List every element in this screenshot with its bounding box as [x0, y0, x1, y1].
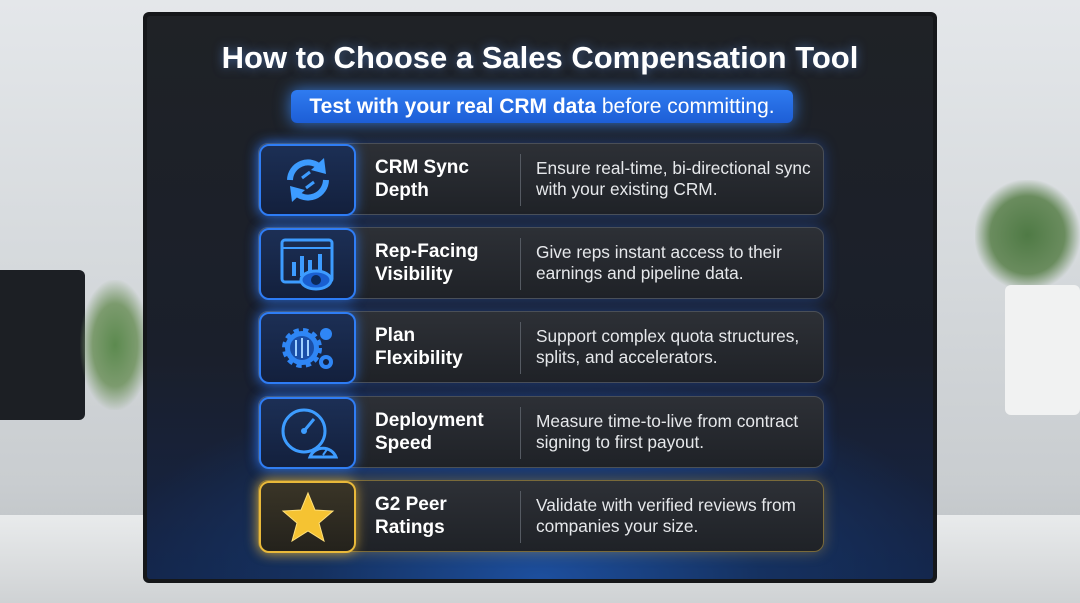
heading: [375, 325, 463, 369]
screen: [147, 16, 933, 579]
subtitle pill: [291, 90, 793, 123]
description: Support complex quota structures,: [536, 326, 799, 346]
description: with your existing CRM.: [536, 179, 718, 199]
heading: Visibility: [375, 264, 453, 285]
description: Ensure real-time, bi-directional sync: [536, 158, 811, 178]
heading: [375, 494, 447, 538]
icon: star: [259, 481, 356, 553]
card: Plan Flexibility: [258, 311, 824, 383]
icon: gears: [259, 312, 356, 384]
card: Rep-Facing Visibility: [258, 227, 824, 299]
description: [536, 411, 798, 452]
background: left plant: [80, 280, 150, 410]
title: How to Choose a Sales Compensation Tool: [222, 40, 858, 75]
heading: Depth: [375, 180, 429, 201]
heading: Flexibility: [375, 348, 463, 369]
heading: [375, 410, 484, 454]
heading: CRM Sync: [375, 157, 469, 178]
subtitle pill: Test with your real CRM data before committing.: [309, 95, 775, 118]
background: right plant: [975, 180, 1080, 290]
heading: [375, 157, 469, 201]
background: office left monitor: [0, 270, 85, 420]
icon: dashboard eye: [259, 228, 356, 300]
heading: Deployment: [375, 410, 484, 431]
description: companies your size.: [536, 516, 698, 536]
background: right white monitor: [1005, 285, 1080, 415]
heading: Plan: [375, 325, 415, 346]
monitor: [143, 12, 937, 583]
card: G2 Peer Ratings: [258, 480, 824, 552]
heading: Rep-Facing: [375, 241, 478, 262]
icon: speedometer: [259, 397, 356, 469]
heading: Speed: [375, 433, 432, 454]
description: [536, 242, 782, 283]
description: [536, 495, 796, 536]
description: splits, and accelerators.: [536, 347, 718, 367]
description: Validate with verified reviews from: [536, 495, 796, 515]
description: [536, 326, 799, 367]
card: CRM Sync Depth: [258, 143, 824, 215]
description: Measure time-to-live from contract: [536, 411, 798, 431]
description: signing to first payout.: [536, 432, 704, 452]
heading: Ratings: [375, 517, 445, 538]
description: earnings and pipeline data.: [536, 263, 744, 283]
description: Give reps instant access to their: [536, 242, 782, 262]
card: Deployment Speed: [258, 396, 824, 468]
description: [536, 158, 811, 199]
background: desk: [0, 515, 1080, 603]
icon: sync arrows: [259, 144, 356, 216]
heading: G2 Peer: [375, 494, 447, 515]
heading: [375, 241, 478, 285]
